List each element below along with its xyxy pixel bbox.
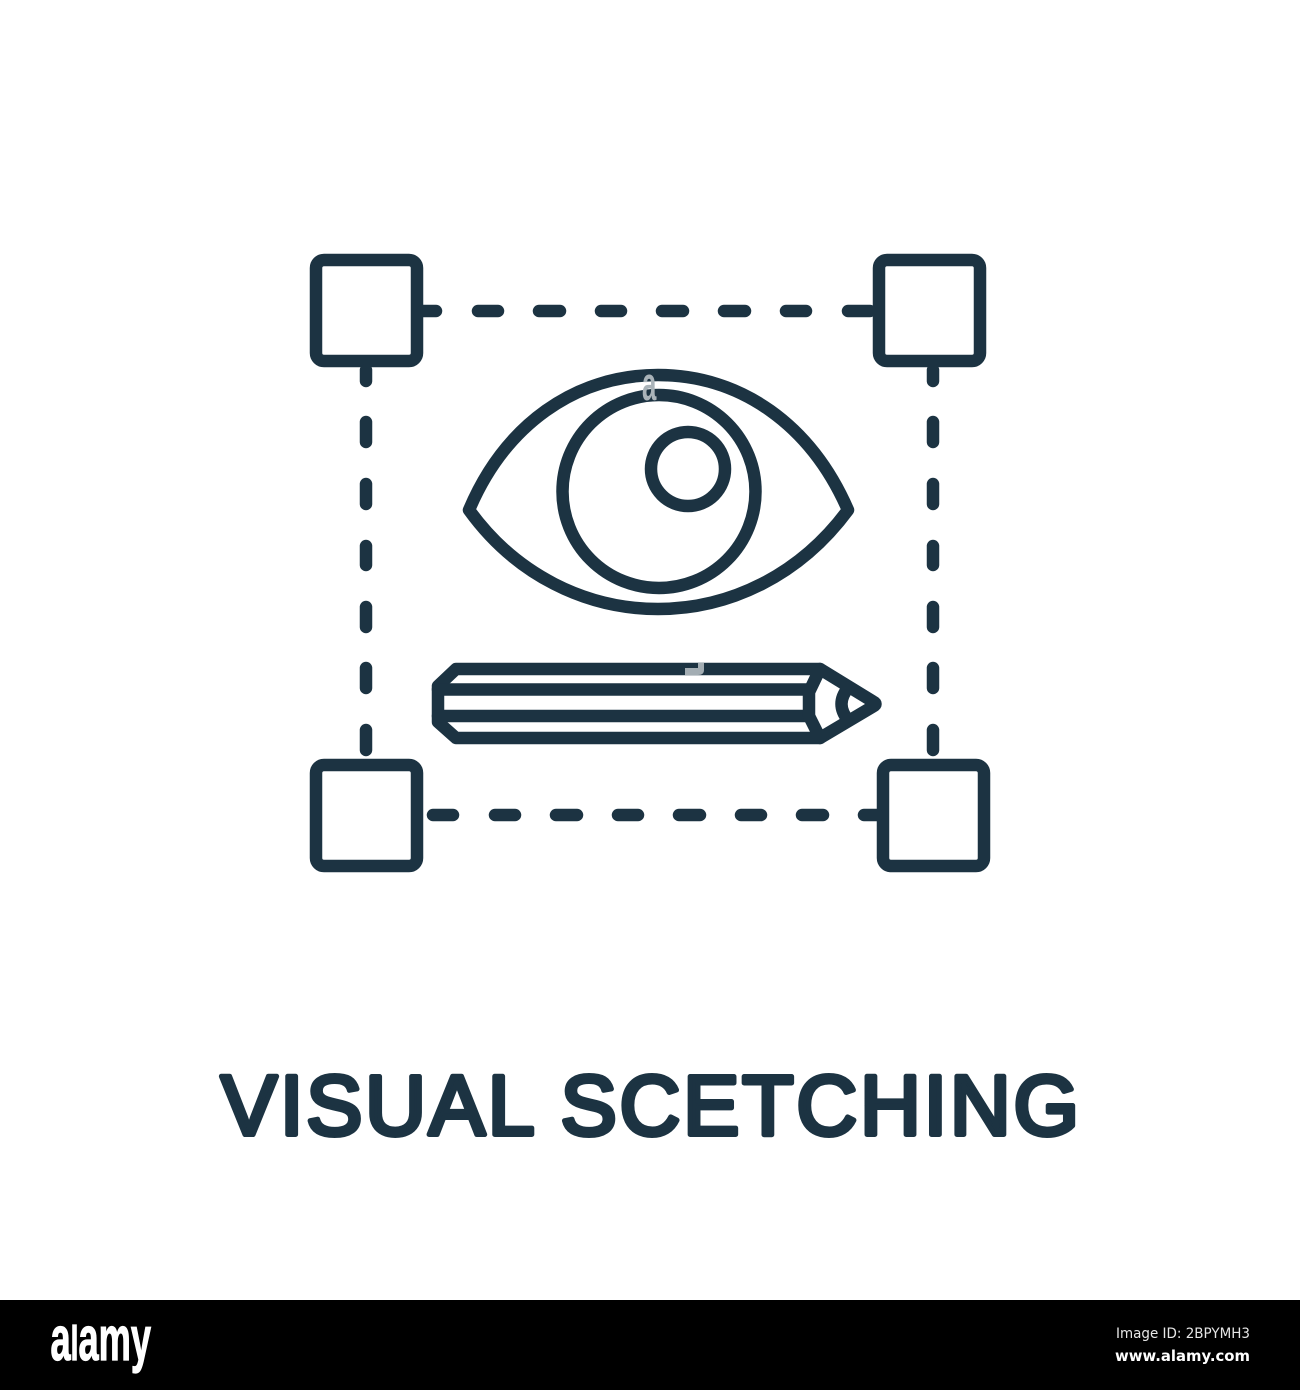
pencil body and tip outline: [438, 669, 876, 738]
icon: pencil: [438, 669, 876, 738]
image id: Image ID: 2BPYMH3: [1116, 1326, 1250, 1342]
dashed line: right edge: [927, 370, 939, 750]
dashed line: bottom edge: [433, 809, 877, 821]
icon: bottom-right anchor square: [883, 765, 984, 866]
pencil lead edge: [842, 688, 848, 720]
logo: alamy: alamy: [50, 1304, 151, 1373]
icon: top-right anchor square: [879, 260, 980, 361]
icon: top-left anchor square: [316, 260, 417, 361]
pencil wood edge: [809, 669, 820, 738]
icon: bottom-left anchor square: [316, 765, 417, 866]
pencil facet lines: [438, 690, 809, 716]
dashed line: top edge: [423, 305, 870, 317]
icon: eye iris: [562, 395, 756, 588]
website: www.alamy.com: [1115, 1347, 1250, 1365]
icon: visual sketching: [316, 260, 984, 866]
title: VISUAL SCETCHING: [221, 1058, 1079, 1152]
footer banner: [0, 1300, 1300, 1390]
dashed line: left edge: [360, 370, 372, 750]
watermark remnant on pencil: [685, 663, 704, 675]
icon: eye pupil highlight: [651, 432, 725, 506]
icon: eye outline: [469, 375, 848, 609]
watermark remnant letter on eye: a: [642, 359, 657, 411]
